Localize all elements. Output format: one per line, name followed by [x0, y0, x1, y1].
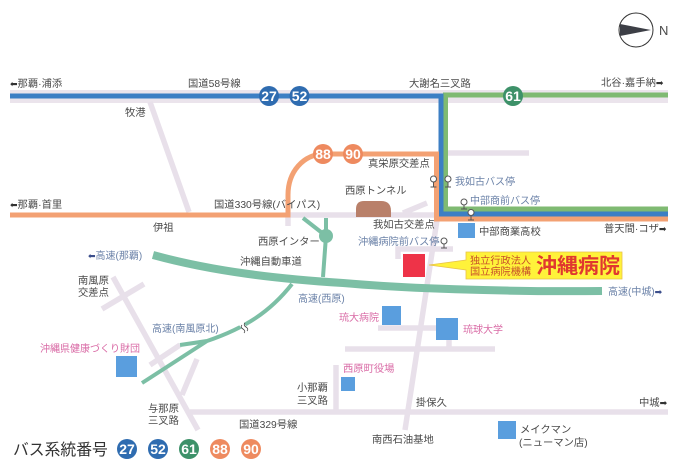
- route badges on map: 52: [292, 88, 307, 104]
- bus stop labels: 中部商前バス停: [470, 194, 540, 207]
- bus route 27 52 blue: [10, 96, 668, 214]
- road labels: 国道329号線: [239, 418, 298, 431]
- road labels: 北谷·嘉手納➡: [601, 76, 664, 89]
- road labels: ⬅那覇·首里: [10, 198, 62, 211]
- road labels: 真栄原交差点: [368, 157, 430, 170]
- road labels: (ニューマン店): [519, 437, 588, 449]
- hospital callout: [429, 252, 622, 279]
- expressway labels: ⬅高速(那覇): [88, 249, 142, 262]
- road labels: 交差点: [78, 286, 109, 299]
- road labels: 掛保久: [416, 396, 447, 409]
- facility labels: [40, 311, 503, 375]
- road labels: ⬅那覇·浦添: [10, 77, 62, 90]
- bus number legend: 61: [181, 441, 197, 457]
- road labels: 中部商業高校: [479, 225, 541, 238]
- road labels: 西原インター: [258, 236, 320, 248]
- road labels: 南風原: [78, 274, 109, 287]
- facility labels: 琉球大学: [463, 323, 503, 336]
- road labels: 伊祖: [153, 221, 174, 234]
- hospital callout: 独立行政法人: [470, 254, 531, 267]
- bus stop labels: [358, 175, 540, 248]
- facilities: [116, 223, 516, 439]
- road labels: 三叉路: [297, 394, 329, 407]
- road labels: 普天間·コザ➡: [604, 222, 667, 235]
- bus stop labels: 沖縄病院前バス停: [358, 235, 440, 248]
- bus number legend: [13, 439, 261, 459]
- bus number legend: 90: [243, 441, 259, 457]
- expressway labels: 高速(南風原北): [152, 322, 219, 335]
- bus route 88 90 orange: [10, 154, 668, 219]
- facility labels: 琉大病院: [339, 311, 379, 324]
- road labels: 国道330号線(バイパス): [214, 198, 320, 211]
- route badges on map: 88: [315, 146, 331, 162]
- road labels: 牧港: [125, 106, 146, 119]
- road labels: 与那原: [148, 402, 179, 415]
- road labels: 三叉路: [148, 414, 180, 427]
- compass: N: [659, 23, 668, 38]
- compass: [619, 13, 668, 47]
- road labels: 我如古交差点: [373, 218, 435, 231]
- expressway labels: 高速(中城)➡: [608, 285, 663, 298]
- icon: expressway break mark: [240, 322, 248, 333]
- tunnel: [356, 201, 391, 217]
- facility labels: 西原町役場: [343, 362, 394, 375]
- road labels: [10, 76, 668, 449]
- road labels: 南西石油基地: [372, 433, 434, 446]
- road labels: 小那覇: [297, 382, 328, 394]
- bus number legend: 88: [212, 441, 228, 457]
- bus number legend: バス系統番号: [13, 441, 108, 459]
- route badges on map: [259, 86, 523, 164]
- route badges on map: 90: [345, 146, 361, 162]
- bus route 61 green: [446, 95, 668, 209]
- road labels: 大謝名三叉路: [409, 77, 471, 90]
- route badges on map: 61: [505, 88, 521, 104]
- bus stop labels: 我如古バス停: [455, 175, 515, 188]
- road labels: 沖縄自動車道: [240, 255, 302, 268]
- road labels: 西原トンネル: [345, 185, 407, 197]
- hospital callout: 沖縄病院: [536, 255, 620, 278]
- expressway labels: 高速(西原): [298, 292, 345, 305]
- route badges on map: 27: [261, 88, 277, 104]
- expressway: [142, 218, 602, 383]
- road labels: 中城➡: [639, 396, 668, 409]
- bus number legend: 27: [119, 441, 135, 457]
- expressway labels: [88, 249, 663, 335]
- bus number legend: 52: [150, 441, 166, 457]
- road labels: メイクマン: [520, 424, 571, 436]
- road labels: 国道58号線: [188, 77, 241, 90]
- minor roads: [10, 90, 668, 430]
- hospital callout: 国立病院機構: [470, 265, 531, 278]
- facility labels: 沖縄県健康づくり財団: [40, 342, 140, 355]
- hospital marker: [403, 254, 425, 277]
- bus stops: [430, 176, 474, 248]
